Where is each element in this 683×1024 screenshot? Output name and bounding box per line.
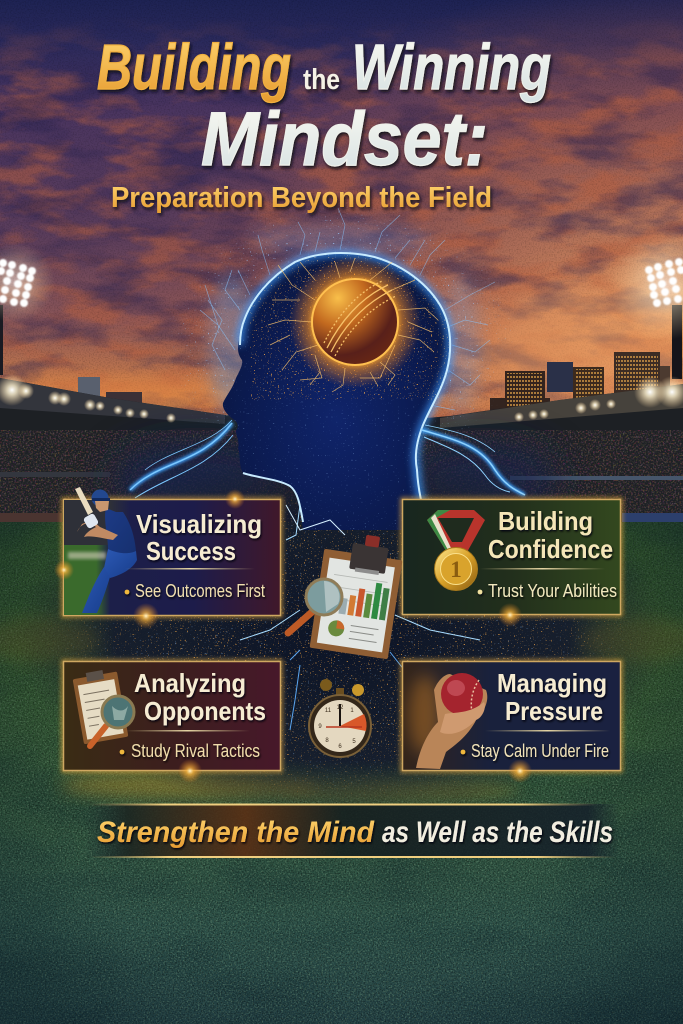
outer electric aura (200, 208, 495, 410)
background: city skyline (78, 352, 670, 416)
cricket ball (312, 279, 398, 365)
icon: stopwatch: 9 (318, 724, 322, 730)
head outline (240, 253, 450, 522)
banner: strengthen the mind (85, 804, 620, 858)
heading: main title: Mindset: (201, 97, 488, 182)
icon: stopwatch (309, 679, 371, 757)
icon: stopwatch: 6 (338, 744, 342, 750)
glowing ball halo (289, 256, 421, 388)
icon: gold medal: 1 (450, 557, 462, 582)
icon: scouting clipboard with magnifier (72, 668, 134, 746)
heading: analyzing opponents: Opponents (144, 696, 266, 726)
heading: visualizing success: Success (146, 536, 236, 566)
lower lightning (240, 505, 480, 730)
icon: gold medal (427, 510, 485, 590)
heading: analyzing opponents: Analyzing (134, 668, 246, 698)
icon: stopwatch: 11 (325, 708, 332, 714)
icon: stopwatch: 12 (337, 705, 344, 711)
heading: managing pressure (497, 668, 607, 726)
caption: trust your abilities: Trust Your Abilities (488, 581, 617, 601)
icon: stopwatch: 5 (352, 739, 356, 745)
background: sunset sky (0, 0, 683, 425)
brain neural network (268, 258, 438, 392)
neural streams right (422, 425, 525, 495)
panel: visualizing success (54, 487, 281, 629)
panel: managing pressure (402, 661, 621, 783)
aura sparkles around head (167, 202, 512, 460)
head fill (220, 250, 455, 535)
panel: building confidence (402, 499, 621, 627)
stadium roof lights (0, 374, 683, 423)
heading: managing pressure: Pressure (505, 696, 603, 726)
banner: strengthen the mind: as Well as the Skills (382, 816, 613, 849)
background: grass field (0, 522, 683, 1024)
icon: clipboard with bar chart and magnifier (288, 529, 405, 659)
illustration: glowing head silhouette with cricket ball (130, 190, 525, 730)
heading: main title: Building (97, 31, 291, 103)
heading: visualizing success (136, 509, 262, 566)
banner: strengthen the mind: Strengthen the Mind (97, 816, 375, 849)
background: stadium stands and crowd (0, 378, 683, 525)
icon: hand gripping cricket ball (416, 673, 487, 769)
heading: main title: Winning (352, 31, 551, 103)
caption: study rival tactics: Study Rival Tactics (131, 741, 260, 761)
heading: building confidence: Confidence (488, 534, 613, 564)
caption: see outcomes first: See Outcomes First (135, 581, 265, 601)
heading: main title (97, 31, 551, 182)
icon: stopwatch: 1 (350, 708, 354, 714)
panel: analyzing opponents (63, 661, 281, 783)
heading: building confidence: Building (498, 506, 593, 536)
central dark starfield between the panels (0, 455, 683, 815)
heading: analyzing opponents (134, 668, 266, 726)
caption: stay calm under fire: Stay Calm Under Fire (471, 741, 609, 761)
icon: stopwatch: 8 (325, 738, 329, 744)
heading: visualizing success: Visualizing (136, 509, 262, 539)
subtitle: Preparation Beyond the Field (111, 182, 492, 214)
heading: building confidence (488, 506, 613, 564)
neural streams left (130, 420, 233, 498)
floodlight: right (610, 230, 683, 379)
heading: managing pressure: Managing (497, 668, 607, 698)
icon: cricket batter (75, 487, 137, 613)
head outline glow (240, 253, 450, 515)
floodlight: left (0, 243, 55, 375)
heading: main title: the (303, 64, 340, 96)
